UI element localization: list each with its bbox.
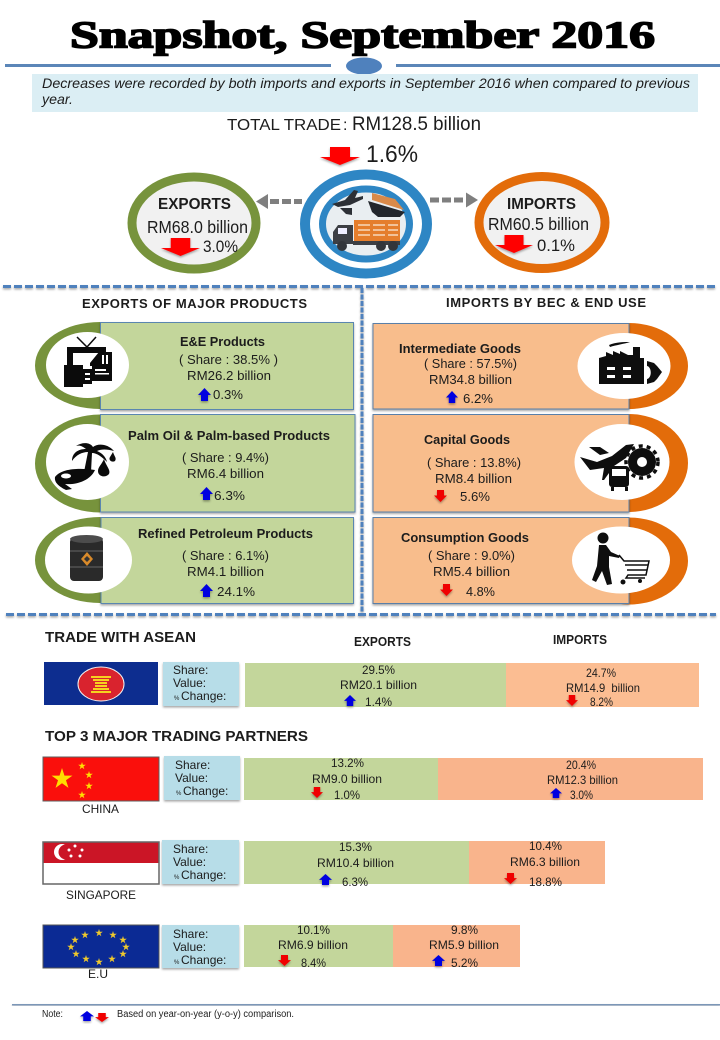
label box: ASEAN <box>163 662 239 706</box>
circle: exports: 3.0% <box>203 238 238 256</box>
circle: imports <box>479 176 605 268</box>
icon: factory <box>599 342 662 384</box>
text: intermediate figures: ( Share : 57.5%) <box>424 356 517 371</box>
heading: imports by BEC: IMPORTS BY BEC & END USE <box>446 295 646 310</box>
total trade heading: RM128.5 billion <box>352 114 481 135</box>
flag: China <box>43 757 159 801</box>
text: E&E figures: ( Share : 38.5% ) <box>179 352 278 367</box>
card: intermediate goods <box>373 323 688 409</box>
text: palm oil figures: RM6.4 billion <box>187 466 264 481</box>
bar: Singapore exports: 6.3% <box>342 875 368 889</box>
card: capital goods <box>373 414 688 512</box>
bar: ASEAN exports <box>245 663 506 709</box>
bar: China imports: 3.0% <box>570 788 593 802</box>
card: refined petroleum <box>35 517 354 604</box>
bar: China exports <box>244 756 438 802</box>
bar: EU exports: 8.4% <box>301 956 326 970</box>
label box: Singapore <box>162 840 239 884</box>
bar: EU imports: 9.8% <box>451 923 478 937</box>
icon: palm and oil <box>55 443 116 490</box>
text: intermediate figures: RM34.8 billion <box>429 372 512 387</box>
text: E&E figures: 0.3% <box>213 387 243 402</box>
card: palm oil <box>35 414 355 512</box>
bar: EU exports: 10.1% <box>297 923 330 937</box>
label box: Singapore: Share: <box>173 842 208 856</box>
bar: ASEAN imports: 8.2% <box>590 695 613 709</box>
arrow: hub to exports <box>256 194 302 209</box>
label: EU: E.U <box>88 967 108 981</box>
label box: ASEAN: Share: <box>173 663 208 677</box>
total trade change <box>320 141 418 168</box>
bar: China imports: RM12.3 billion <box>547 773 618 787</box>
bar: Singapore exports <box>244 840 469 889</box>
intro text box <box>32 74 698 112</box>
bar: EU imports <box>393 923 520 970</box>
label box: EU: Change: <box>181 953 226 967</box>
text: petroleum figures: ( Share : 6.1%) <box>182 548 269 563</box>
bar: Singapore imports <box>469 839 605 889</box>
bar: EU exports <box>244 923 393 970</box>
label box: ASEAN: Change: <box>181 689 226 703</box>
text: palm oil figures: Palm Oil & Palm-based Products <box>128 428 330 443</box>
label box: EU <box>162 925 239 968</box>
note: Note: <box>42 1009 63 1020</box>
total trade heading <box>227 114 481 135</box>
label box: Singapore: Change: <box>181 868 226 882</box>
row: China <box>43 756 703 816</box>
bar: ASEAN imports <box>506 663 699 709</box>
arrow: hub to imports <box>430 192 478 208</box>
bar: China exports: 1.0% <box>334 788 360 802</box>
icon: plane bus gear <box>580 444 658 491</box>
text: palm oil figures: ( Share : 9.4%) <box>182 450 269 465</box>
circle: exports: RM68.0 billion <box>147 217 248 237</box>
bar: EU imports: RM5.9 billion <box>429 938 499 952</box>
label box: China <box>164 756 240 800</box>
note <box>42 1009 294 1022</box>
label box: EU: Value: <box>173 940 206 954</box>
row: EU <box>43 923 520 981</box>
icon: electronics <box>64 337 112 387</box>
bar: Singapore imports: RM6.3 billion <box>510 855 580 869</box>
intro text box: Decreases were recorded by both imports and exports in September 2016 when compared to previous <box>42 75 690 91</box>
note: Based on year-on-year (y-o-y) comparison. <box>117 1009 294 1020</box>
icon: truck <box>333 220 400 251</box>
circle: imports: RM60.5 billion <box>488 214 589 234</box>
text: capital figures: ( Share : 13.8%) <box>427 455 521 470</box>
text: petroleum figures: 24.1% <box>217 584 255 599</box>
label: Singapore: SINGAPORE <box>66 888 136 902</box>
text: consumption figures: Consumption Goods <box>401 530 529 545</box>
total trade change: 1.6% <box>366 141 418 168</box>
text: petroleum figures: Refined Petroleum Products <box>138 526 313 541</box>
text: capital figures <box>424 432 521 504</box>
bar: ASEAN imports: 24.7% <box>586 666 616 680</box>
bar: China imports <box>438 758 703 802</box>
label box: EU: Share: <box>173 927 208 941</box>
icon: cargo ship <box>368 193 405 217</box>
total trade heading: : <box>343 117 347 134</box>
text: E&E figures: E&E Products <box>180 334 265 349</box>
icon: plane <box>332 190 363 215</box>
bar: China exports: 13.2% <box>331 756 364 770</box>
text: consumption figures: 4.8% <box>466 584 495 599</box>
row: ASEAN <box>44 662 699 709</box>
circle: imports: IMPORTS <box>507 196 576 213</box>
label box: ASEAN: Value: <box>173 676 206 690</box>
text: capital figures: 5.6% <box>460 489 490 504</box>
text: consumption figures: RM5.4 billion <box>433 564 510 579</box>
label box: Singapore: Value: <box>173 855 206 869</box>
text: petroleum figures <box>138 526 313 599</box>
label: China: CHINA <box>82 802 119 816</box>
title: Snapshot, September 2016 <box>70 14 655 56</box>
flag: ASEAN <box>44 662 158 705</box>
bar: ASEAN imports: RM14.9 billion <box>566 681 640 695</box>
row: Singapore <box>43 839 605 902</box>
intro text box: year. <box>41 91 73 107</box>
text: capital figures: Capital Goods <box>424 432 510 447</box>
text: consumption figures <box>401 530 529 599</box>
label box: China: Share: <box>175 758 210 772</box>
text: petroleum figures: RM4.1 billion <box>187 564 264 579</box>
heading: top 3 partners: TOP 3 MAJOR TRADING PARTNERS <box>45 728 308 745</box>
text: palm oil figures: 6.3% <box>214 488 245 503</box>
bar: EU exports: RM6.9 billion <box>278 938 348 952</box>
bar: Singapore exports: 15.3% <box>339 840 372 854</box>
bar: EU imports: 5.2% <box>451 956 478 970</box>
bar: ASEAN exports: 29.5% <box>362 663 395 677</box>
card: consumption goods <box>373 518 688 604</box>
bar: China exports: RM9.0 billion <box>312 772 382 786</box>
flag: EU <box>43 925 159 968</box>
bar: ASEAN exports: 1.4% <box>365 695 392 709</box>
text: intermediate figures <box>399 341 521 406</box>
flag: Singapore <box>43 842 159 884</box>
label box: China: % <box>176 791 182 797</box>
heading: trade with ASEAN: TRADE WITH ASEAN <box>45 629 196 646</box>
icon: person with cart <box>592 532 649 585</box>
circle: imports: 0.1% <box>537 237 575 255</box>
panel: imports by BEC and end use <box>373 295 688 604</box>
label box: EU: % <box>174 960 180 966</box>
panel: exports of major products <box>35 296 355 604</box>
circle: exports <box>132 177 256 269</box>
circle: exports: EXPORTS <box>158 196 231 213</box>
text: palm oil figures <box>128 428 330 503</box>
column heading: exports: EXPORTS <box>354 635 411 649</box>
label box: China: Change: <box>183 784 228 798</box>
heading: exports of major products: EXPORTS OF MAJOR PRODUCTS <box>82 296 307 311</box>
text: intermediate figures: 6.2% <box>463 391 493 406</box>
label box: Singapore: % <box>174 875 180 881</box>
bar: China imports: 20.4% <box>566 758 596 772</box>
total trade heading: TOTAL TRADE <box>227 117 341 134</box>
text: capital figures: RM8.4 billion <box>435 471 512 486</box>
bar: Singapore imports: 18.8% <box>529 875 562 889</box>
bar: ASEAN exports: RM20.1 billion <box>340 678 417 692</box>
hub: trade icon ring <box>305 174 427 274</box>
column heading: imports: IMPORTS <box>553 633 607 647</box>
label box: China: Value: <box>175 771 208 785</box>
icon: oil barrel <box>70 535 103 581</box>
text: E&E figures: RM26.2 billion <box>187 368 271 383</box>
bar: Singapore imports: 10.4% <box>529 839 562 853</box>
text: intermediate figures: Intermediate Goods <box>399 341 521 356</box>
title rule with centre dot <box>5 58 720 74</box>
text: consumption figures: ( Share : 9.0%) <box>428 548 515 563</box>
label box: ASEAN: % <box>174 696 180 702</box>
text: E&E figures <box>179 334 278 402</box>
card: E&E products <box>35 322 354 410</box>
bar: Singapore exports: RM10.4 billion <box>317 856 394 870</box>
